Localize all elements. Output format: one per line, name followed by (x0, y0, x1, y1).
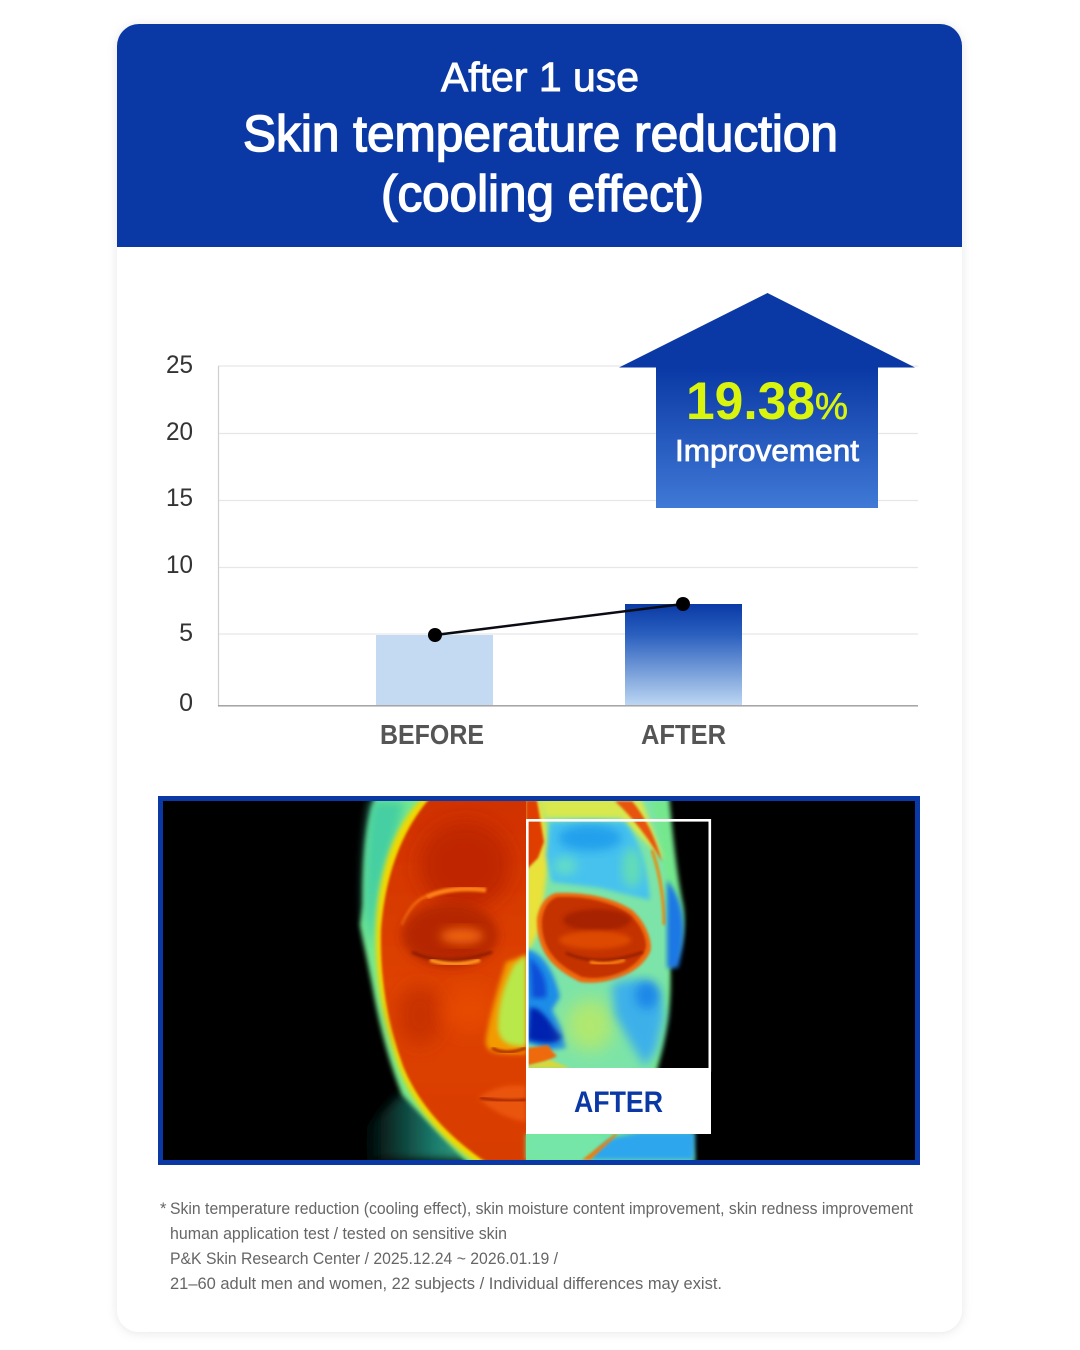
lip (527, 1045, 557, 1066)
cheek mottling (398, 985, 442, 1045)
right face base (526, 795, 668, 1090)
neck left fade (366, 1092, 468, 1160)
trend line (428, 597, 690, 642)
x-axis labels (380, 719, 726, 750)
nose side blue (526, 950, 566, 1050)
y-axis labels: 25 (166, 351, 193, 379)
after highlight box (526, 820, 711, 1134)
x-axis labels: AFTER (641, 719, 726, 750)
title: Skin temperature reduction (243, 105, 838, 162)
mouth (478, 1085, 526, 1122)
title (243, 54, 838, 222)
footnote: P&K Skin Research Center / 2025.12.24 ~ 2026.01.19 / (170, 1250, 558, 1268)
footnote: Skin temperature reduction (cooling effect), skin moisture content improvement, skin redness improvement (170, 1200, 913, 1218)
title: After 1 use (441, 54, 639, 100)
top yellow hairline (538, 795, 664, 860)
forehead blue (546, 822, 650, 900)
yellow transition (372, 801, 486, 1160)
y-axis labels: 5 (179, 619, 193, 647)
y-axis labels: 20 (166, 418, 193, 446)
neck right blue (590, 1132, 695, 1160)
right cheek blue (612, 980, 664, 1066)
after highlight box: AFTER (574, 1086, 663, 1119)
y-axis labels: 0 (179, 689, 193, 717)
y-axis labels: 15 (166, 484, 193, 512)
red half (381, 798, 530, 1165)
footnote (160, 1200, 913, 1293)
hair edge red (615, 801, 662, 862)
forehead dark (419, 821, 511, 909)
arrow callout: 19.38% improvement (619, 293, 915, 508)
panel: main card (117, 24, 962, 1332)
y-axis labels (166, 351, 193, 717)
right eye socket (537, 893, 651, 983)
cheek green (566, 999, 614, 1051)
thermal face image (160, 795, 918, 1165)
bar chart (166, 351, 918, 750)
arrow callout: 19.38% improvement: 19.38 (686, 372, 815, 431)
left eye lid (412, 952, 492, 960)
nose (486, 955, 526, 1054)
center yellow stripe (526, 800, 550, 955)
footnote: * (160, 1200, 167, 1218)
footnote: 21–60 adult men and women, 22 subjects / Individual differences may exist. (170, 1275, 722, 1293)
x-axis labels: BEFORE (380, 719, 484, 750)
bar: after (625, 604, 742, 705)
header banner (117, 24, 962, 247)
y-axis labels: 10 (166, 551, 193, 579)
arrow callout: 19.38% improvement: Improvement (675, 433, 859, 468)
footnote: human application test / tested on sensitive skin (170, 1225, 507, 1243)
right ear blue (667, 880, 683, 968)
arrow callout: 19.38% improvement: % (815, 386, 848, 427)
left cyan rim (365, 800, 405, 950)
head halo (360, 795, 695, 1165)
bar: before (376, 635, 493, 705)
title: (cooling effect) (381, 165, 704, 222)
left brow (402, 896, 428, 925)
eye socket (402, 903, 498, 967)
